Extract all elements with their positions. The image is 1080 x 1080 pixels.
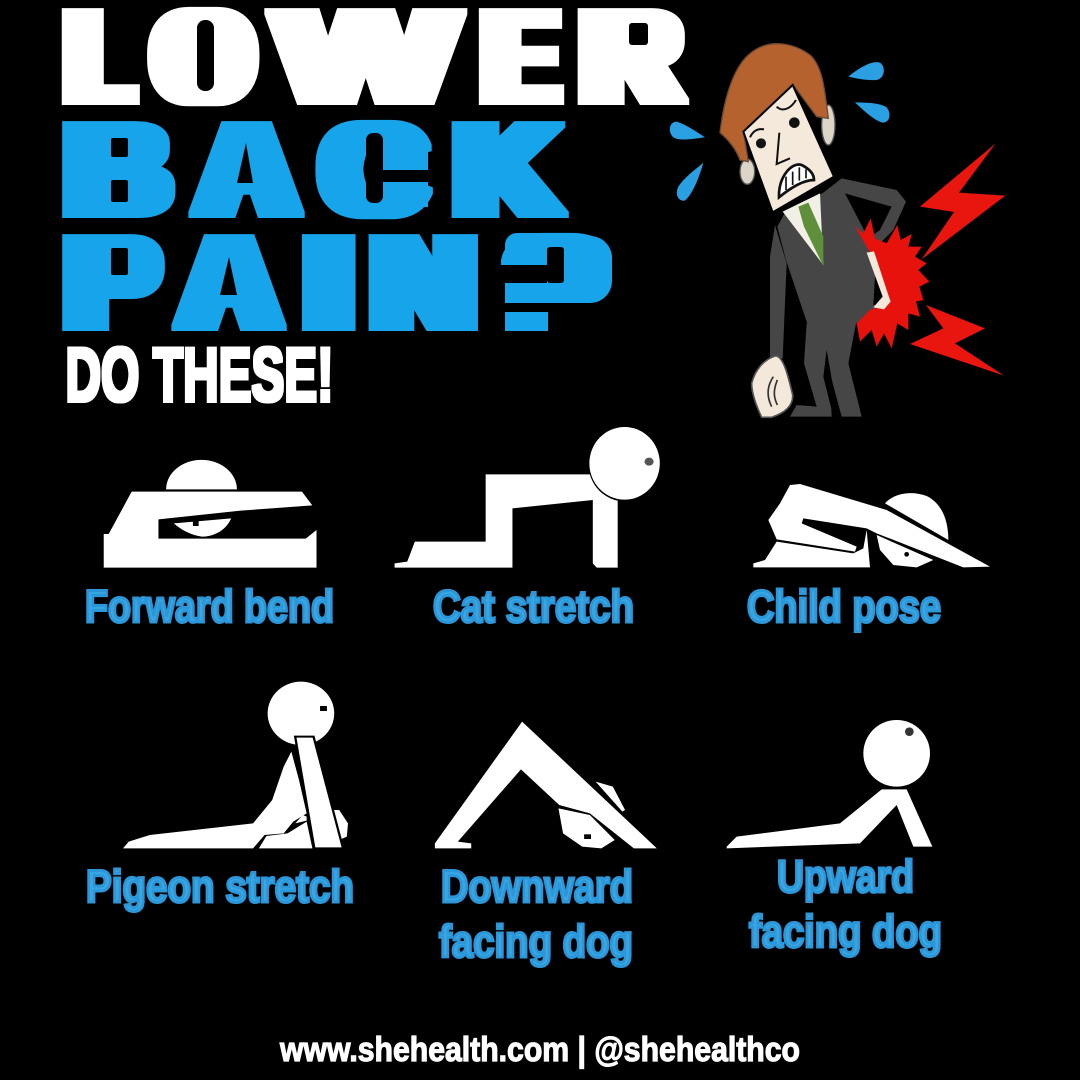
panel: upward facing dog	[727, 720, 942, 957]
title line: PAIN?: N	[373, 209, 473, 356]
figure: upward facing dog	[727, 720, 932, 848]
title line: PAIN?: P	[67, 209, 155, 356]
title line: BACK: B	[67, 96, 168, 243]
footer: website and handle: www.shehealth.com | @shehealthco	[279, 1031, 800, 1069]
title	[66, 0, 678, 418]
jacket	[777, 178, 906, 332]
label: Forward bend: Forward bend	[85, 581, 334, 632]
shirt	[783, 193, 823, 265]
hand on knee	[752, 356, 793, 417]
panel: cat stretch	[395, 425, 661, 632]
panel: child pose	[747, 484, 990, 632]
label: Cat stretch: Cat stretch	[433, 581, 634, 632]
hair	[720, 44, 828, 162]
panel: downward facing dog	[435, 722, 657, 967]
tie	[798, 203, 823, 266]
label: Child pose: Child pose	[747, 581, 941, 632]
lightning bolts	[910, 143, 1005, 376]
panel: pigeon stretch	[86, 682, 354, 912]
title line: BACK: K	[456, 96, 556, 243]
label: Downward facing dog: facing dog	[439, 916, 633, 967]
figure: child pose	[753, 484, 990, 567]
hand on back	[867, 251, 891, 309]
eyes, brow, nose and mouth	[750, 100, 814, 197]
label: Upward facing dog	[749, 851, 942, 957]
legs	[790, 320, 862, 417]
ears	[822, 105, 835, 145]
face	[743, 85, 834, 212]
title line: PAIN?: A	[182, 209, 276, 356]
figure: downward facing dog	[435, 722, 657, 848]
icon: sweat drops	[670, 62, 890, 201]
hanging arm	[770, 225, 787, 358]
label: Downward facing dog: Downward	[441, 861, 633, 912]
title line: PAIN?: ?	[508, 209, 606, 356]
panel: forward bend	[85, 460, 334, 632]
label: Downward facing dog	[439, 861, 633, 967]
figure: pigeon stretch	[123, 682, 348, 848]
figure: cat stretch	[395, 425, 661, 568]
title line: PAIN?: I	[304, 209, 354, 356]
title line: BACK: C	[324, 96, 423, 243]
title line: BACK: A	[199, 96, 294, 243]
figure: forward bend	[104, 460, 317, 568]
pain burst	[855, 218, 929, 348]
label: Upward facing dog: facing dog	[749, 906, 942, 957]
label: Pigeon stretch: Pigeon stretch	[86, 861, 354, 912]
label: Upward facing dog: Upward	[777, 851, 914, 902]
subtitle: DO THESE!: DO THESE!	[66, 333, 334, 418]
letter counters	[95, 15, 655, 333]
illustration: man with back pain	[670, 44, 1005, 417]
